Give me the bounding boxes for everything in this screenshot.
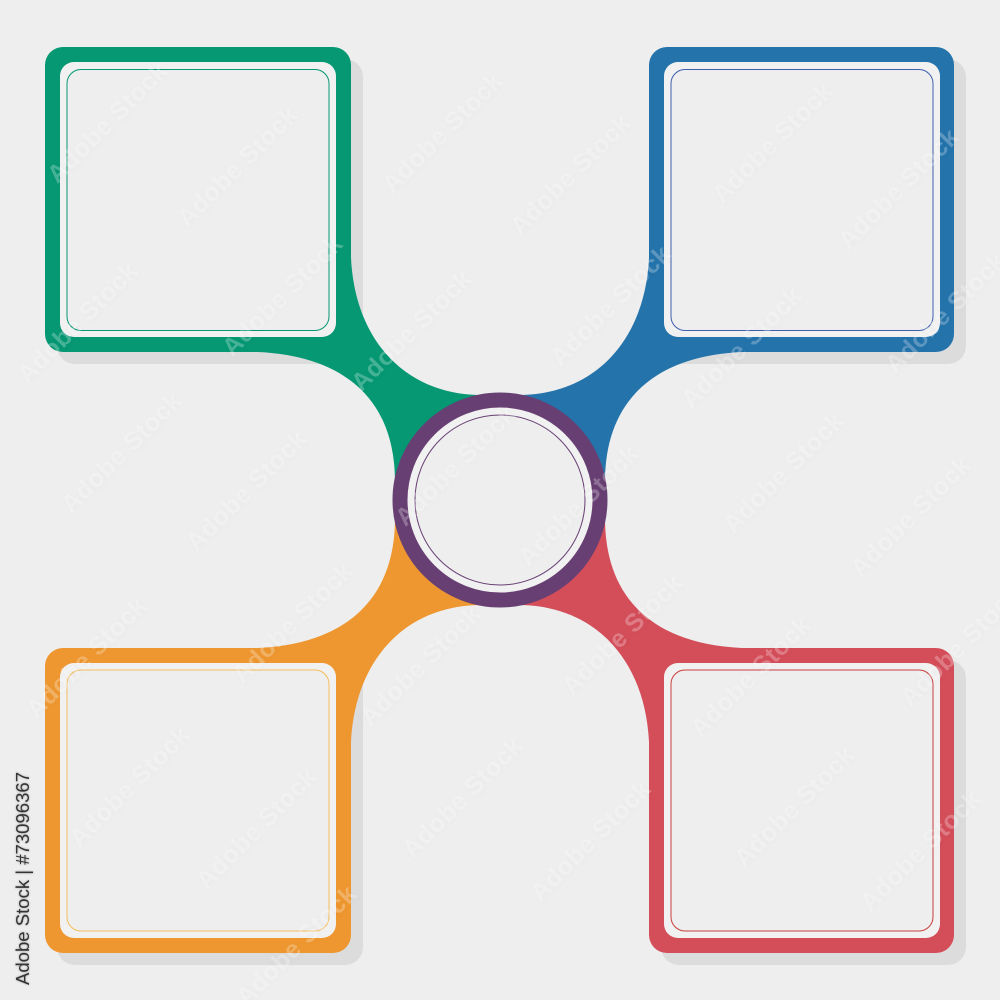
watermark text: Adobe Stock — [181, 425, 313, 557]
green arm — [258, 258, 500, 500]
watermark text: Adobe Stock — [12, 257, 144, 389]
watermark text: Adobe Stock — [390, 400, 522, 532]
watermark text: Adobe Stock — [676, 282, 808, 414]
shadow: green box — [57, 59, 363, 364]
watermark text: Adobe Stock — [685, 611, 817, 743]
green frame — [45, 47, 351, 352]
shadow: blue box — [661, 59, 966, 364]
watermark text: Adobe Stock — [525, 775, 657, 907]
watermark text: Adobe Stock — [42, 57, 174, 189]
blue thin outline — [671, 70, 933, 330]
shadow: orange box — [57, 660, 363, 965]
watermark text: Adobe Stock — [833, 123, 965, 255]
green thin outline — [67, 70, 329, 330]
shadow: red box — [661, 660, 966, 965]
panel: orange bottom-left connector box — [45, 500, 500, 953]
green inner panel — [60, 62, 336, 337]
watermark text: Adobe Stock — [397, 732, 529, 864]
watermark text: Adobe Stock — [513, 440, 645, 572]
inner thin circle — [415, 415, 585, 585]
panel: red bottom-right connector box — [500, 500, 954, 953]
watermark text: Adobe Stock — [545, 240, 677, 372]
red inner panel — [664, 663, 940, 938]
watermark text: Adobe Stock — [707, 77, 839, 209]
watermark text: Adobe Stock — [217, 230, 349, 362]
watermark text: Adobe Stock — [729, 741, 861, 873]
watermark text: Adobe Stock — [21, 592, 153, 724]
watermark text: Adobe Stock — [56, 387, 188, 519]
watermark text: Adobe Stock — [346, 265, 478, 397]
orange frame — [45, 648, 351, 953]
blue arm — [500, 258, 742, 500]
purple ring — [400, 400, 600, 600]
watermark text: Adobe Stock — [227, 557, 359, 689]
panel: blue top-right connector box — [500, 47, 954, 500]
watermark text: Adobe Stock — [355, 600, 487, 732]
watermark text: Adobe Stock — [191, 763, 323, 895]
watermark text: Adobe Stock — [718, 407, 850, 539]
blue frame — [649, 47, 954, 352]
watermark text: Adobe Stock — [845, 451, 977, 583]
orange inner panel — [60, 663, 336, 938]
panel: green top-left connector box — [45, 47, 500, 500]
watermark text: Adobe Stock — [172, 101, 304, 233]
red arm — [500, 500, 742, 742]
red frame — [649, 648, 954, 953]
panel: central purple ring — [400, 400, 600, 600]
orange arm — [258, 500, 500, 742]
red thin outline — [671, 670, 933, 931]
blue inner panel — [664, 62, 940, 337]
watermark text: Adobe Stock — [557, 569, 689, 701]
watermark text: Adobe Stock — [64, 721, 196, 853]
stock id caption: Adobe Stock | #73096367 — [13, 772, 33, 985]
watermark text: Adobe Stock — [505, 109, 637, 241]
orange thin outline — [67, 670, 329, 931]
watermark text: Adobe Stock — [855, 785, 987, 917]
watermark text: Adobe Stock — [377, 67, 509, 199]
